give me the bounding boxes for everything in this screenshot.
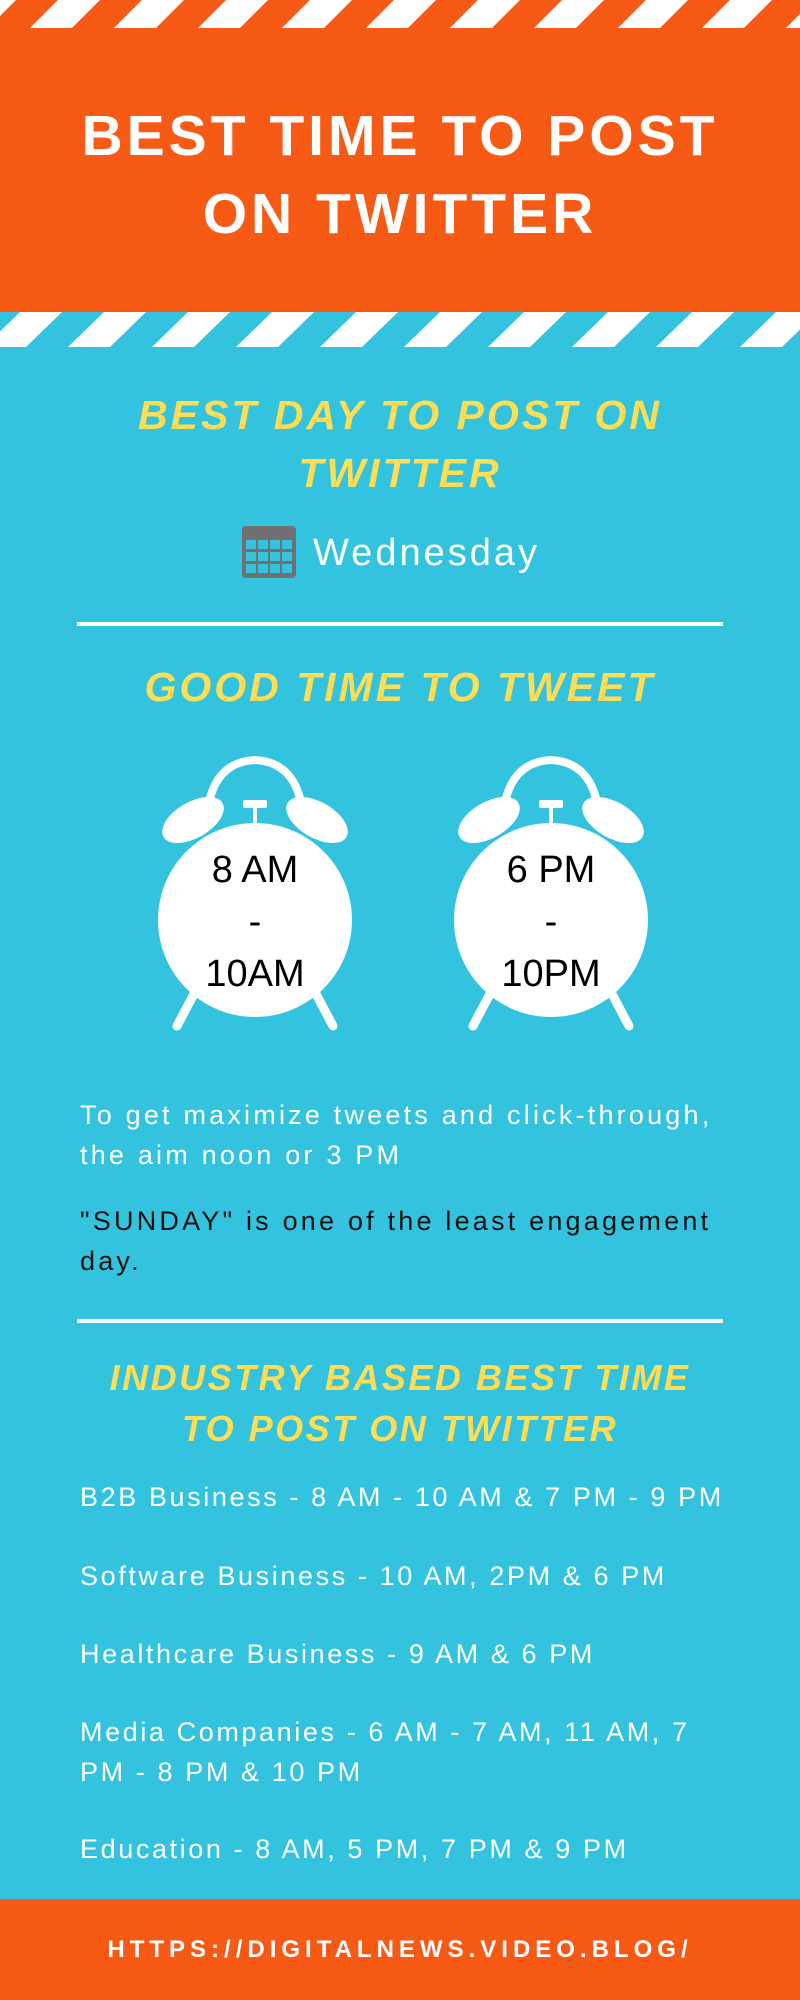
list: industries (80, 1482, 724, 1864)
text: sunday (80, 1206, 711, 1276)
item media: Media Companies - 6 AM - 7 AM, 11 AM, 7 (80, 1717, 690, 1747)
clock 2 text: 6 PM (507, 849, 595, 891)
item b2b: B2B Business - 8 AM - 10 AM & 7 PM - 9 PM (80, 1482, 724, 1512)
clock 1 (158, 756, 352, 1030)
footer: HTTPS://DIGITALNEWS.VIDEO.BLOG/ (107, 1936, 693, 1963)
clock 1 text (205, 849, 305, 995)
text: maximize: To get maximize tweets and click-through, (80, 1100, 712, 1130)
item software: Software Business - 10 AM, 2PM & 6 PM (80, 1561, 667, 1591)
heading: best day (138, 392, 662, 496)
header (0, 0, 800, 347)
heading: good time: GOOD TIME TO TWEET (144, 664, 656, 710)
title (82, 104, 718, 246)
title: ON TWITTER (203, 182, 597, 246)
item education: Education - 8 AM, 5 PM, 7 PM & 9 PM (80, 1834, 629, 1864)
clock 1 text: 10AM (205, 953, 305, 995)
icon: calendar (242, 526, 296, 578)
footer (0, 1899, 800, 2000)
clock 2 text: - (545, 901, 557, 943)
item media: PM - 8 PM & 10 PM (80, 1757, 363, 1787)
text: sunday: day. (80, 1246, 142, 1276)
heading: industry: TO POST ON TWITTER (182, 1408, 618, 1449)
heading: best day: TWITTER (298, 450, 502, 496)
clock 2 (454, 756, 648, 1030)
title: BEST TIME TO POST (82, 104, 718, 168)
heading: industry: INDUSTRY BASED BEST TIME (110, 1357, 690, 1398)
text: maximize (80, 1100, 712, 1170)
clock 1 text: - (249, 901, 261, 943)
clock 2 text (501, 849, 601, 995)
text: Wednesday: Wednesday (313, 532, 540, 574)
item media (80, 1717, 690, 1787)
heading: industry (110, 1357, 690, 1449)
heading: best day: BEST DAY TO POST ON (138, 392, 662, 438)
item healthcare: Healthcare Business - 9 AM & 6 PM (80, 1639, 595, 1669)
clock 1 text: 8 AM (212, 849, 298, 891)
text: maximize: the aim noon or 3 PM (80, 1140, 402, 1170)
clock 2 text: 10PM (501, 953, 601, 995)
text: sunday: "SUNDAY" is one of the least engagement (80, 1206, 711, 1236)
